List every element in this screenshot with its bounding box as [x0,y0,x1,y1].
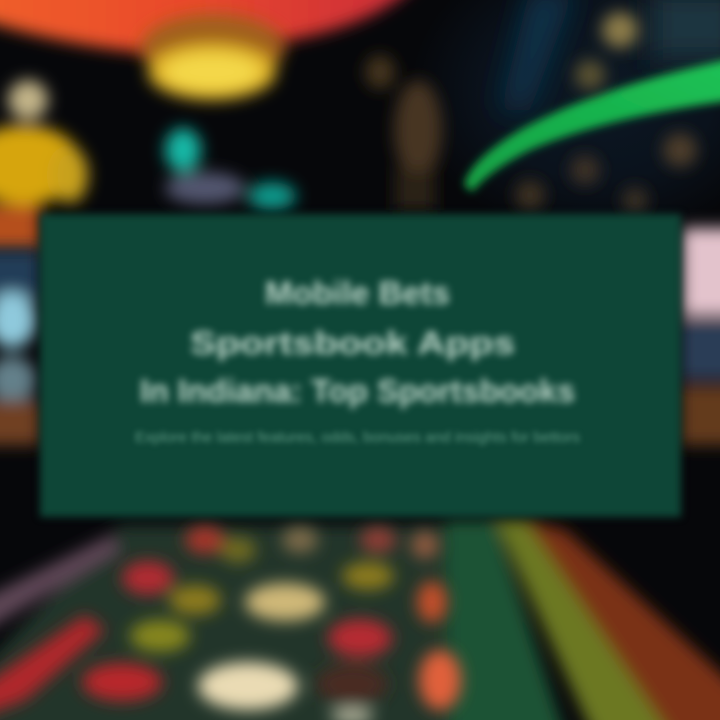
heading line 1: Mobile Bets [265,275,450,311]
ceiling lamp [141,14,285,100]
panel: title card [40,214,681,517]
green neon arc [464,55,720,192]
left edge column [0,250,40,445]
ceiling dark tones [410,0,720,240]
orange lamp canopy [0,0,425,54]
teal figure [165,128,296,210]
brown statue [365,55,442,210]
roulette table cells [0,526,461,720]
right edge column [680,228,720,445]
roulette table base [0,520,720,720]
subtitle: Explore the latest features, odds, bonuses and insights for bettors [135,429,580,446]
yellow figure left [0,80,88,250]
heading line 3: In Indiana: Top Sportsbooks [140,373,575,409]
heading line 2: Sportsbook Apps [190,325,515,361]
lights upper right [515,12,697,213]
